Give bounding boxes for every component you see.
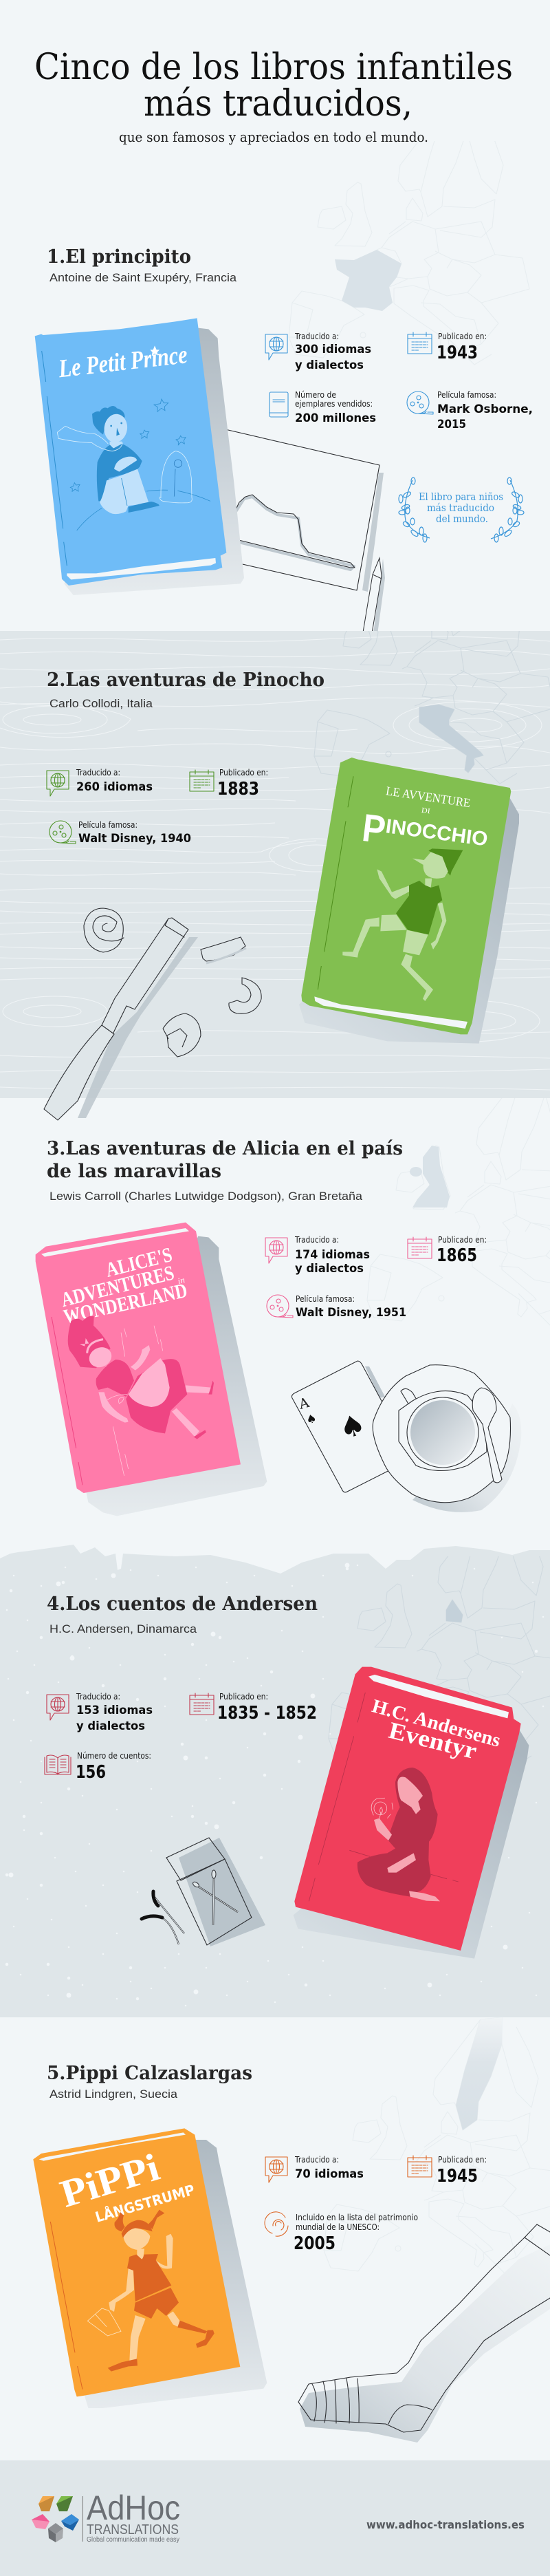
book cover: Pinocchio: LE AVVENTURE <box>385 784 472 810</box>
illustration: paper cutout <box>210 426 384 592</box>
illustration: playing card: A <box>296 1394 311 1413</box>
panel: book 3 Alicia <box>36 1067 550 1516</box>
author: Antoine de Saint Exupéry, Francia <box>50 271 237 284</box>
map: Europe with France highlighted <box>289 141 529 365</box>
book cover: Eventyr <box>294 1667 529 1959</box>
illustration: saucer shadow <box>412 1404 521 1512</box>
stat: translated: y dialectos <box>295 358 364 372</box>
stat: translated: Traducido a: <box>76 768 120 777</box>
background: wood <box>0 631 550 1098</box>
callout: laurel badge <box>399 477 524 542</box>
stat: translated <box>47 1692 153 1733</box>
stat: famous film: Película famosa: <box>437 390 496 400</box>
illustration: sock <box>298 2224 550 2443</box>
figure: little prince <box>57 406 210 530</box>
book cover: Pinocchio: DI <box>421 807 431 815</box>
stat: famous film: Película famosa: <box>296 1294 355 1304</box>
author: Carlo Collodi, Italia <box>50 697 153 710</box>
callout: laurel badge: El libro para niños <box>419 491 503 503</box>
stat: published: Publicado en: <box>219 768 268 777</box>
book cover: Pinocchio <box>299 758 519 1044</box>
stat: published: Publicado en: <box>438 332 487 341</box>
panel: book 5 Pippi <box>33 2017 550 2443</box>
heading: 3.Las aventuras de Alicia en el país <box>47 1138 403 1159</box>
illustration: playing card: ♠ <box>305 1412 318 1428</box>
callout: laurel badge: más traducido <box>427 502 494 514</box>
stat: copies sold: 200 millones <box>295 411 376 425</box>
heading: 4.Los cuentos de Andersen <box>47 1593 318 1615</box>
stat: published <box>190 1692 317 1724</box>
stat: published: 1883 <box>217 779 259 799</box>
logo text: Global communication made easy <box>87 2536 179 2544</box>
illustration: playing card <box>292 1361 412 1492</box>
stat: published <box>408 332 487 363</box>
stat: translated: Traducido a: <box>76 1692 120 1702</box>
stat: translated: y dialectos <box>76 1719 145 1733</box>
stat: published: Publicado en: <box>219 1692 268 1702</box>
logo text: AdHoc <box>87 2489 180 2527</box>
stat: famous film: Walt Disney, 1951 <box>296 1306 406 1320</box>
figure: Alice falling <box>68 1316 214 1476</box>
panel: footer <box>0 2460 550 2576</box>
heading: de las maravillas <box>47 1161 221 1182</box>
stat: translated: 300 idiomas <box>295 343 371 356</box>
website: www.adhoc-translations.es <box>366 2518 525 2531</box>
stat: UNESCO <box>265 2212 418 2254</box>
logo text: TRANSLATIONS <box>87 2522 179 2537</box>
stat: translated: Traducido a: <box>294 1235 339 1245</box>
book cover: Eventyr: Eventyr <box>386 1717 479 1764</box>
book cover: Alice in Wonderland <box>36 1223 267 1516</box>
stat: UNESCO: mundial de la UNESCO: <box>296 2222 380 2232</box>
stat: published <box>408 2155 487 2187</box>
stat: translated <box>47 768 153 796</box>
stat: translated <box>265 332 371 372</box>
book cover: Alice in Wonderland: in <box>177 1275 186 1286</box>
map: Europe with Great Britain highlighted <box>367 1098 550 1325</box>
panel: book 4 Andersen <box>0 1505 550 2017</box>
stat: famous film <box>50 820 191 846</box>
title <box>34 47 513 125</box>
title: Cinco de los libros infantiles <box>34 47 513 88</box>
panel: book 1 El principito <box>35 104 533 645</box>
subtitle: que son famosos y apreciados en todo el mundo. <box>119 129 428 145</box>
title: más traducidos, <box>144 83 412 125</box>
illustration: pencil <box>361 558 385 645</box>
stat: translated: 70 idiomas <box>295 2167 364 2181</box>
heading: 1.El principito <box>47 246 191 268</box>
panel: book 2 Pinocho <box>0 631 550 1121</box>
stat: published: 1945 <box>437 2166 478 2187</box>
stat: famous film <box>407 390 533 431</box>
figure: Pinocchio <box>342 848 463 1001</box>
panel: header <box>34 47 513 145</box>
stat: number of tales: Número de cuentos: <box>77 1751 151 1761</box>
book cover: Le Petit Prince: Le Petit Prince <box>56 341 189 383</box>
author: H.C. Andersen, Dinamarca <box>50 1622 197 1635</box>
author: Astrid Lindgren, Suecia <box>50 2087 178 2101</box>
logo: coloured cubes <box>32 2496 79 2542</box>
heading: 5.Pippi Calzaslargas <box>47 2063 252 2084</box>
stat: famous film <box>267 1294 406 1320</box>
stat: UNESCO: 2005 <box>294 2233 336 2254</box>
heading: 2.Las aventuras de Pinocho <box>47 669 324 691</box>
stat: published: 1835 - 1852 <box>217 1703 317 1724</box>
book cover: Alice in Wonderland: ALICE'S <box>103 1243 175 1282</box>
illustration: chisel <box>44 918 198 1120</box>
stat: translated: y dialectos <box>295 1262 364 1276</box>
stat: famous film: Mark Osborne, <box>437 402 533 416</box>
author: Lewis Carroll (Charles Lutwidge Dodgson), Gran Bretaña <box>50 1190 363 1203</box>
stat: published: 1865 <box>437 1245 477 1266</box>
stat: published: 1943 <box>437 343 478 363</box>
stat: famous film: Walt Disney, 1940 <box>78 832 191 846</box>
callout: laurel badge: del mundo. <box>436 513 488 525</box>
book cover: Alice in Wonderland: ADVENTURES <box>58 1261 177 1311</box>
illustration: matchbox and matches <box>142 1838 265 1946</box>
book cover: Pippi Langstrump: LÅNGSTRUMP <box>93 2181 197 2226</box>
figure: rose under glass <box>160 451 192 503</box>
stat: translated: 153 idiomas <box>76 1704 153 1717</box>
stat: UNESCO: Incluido en la lista del patrimonio <box>296 2213 418 2222</box>
map: Europe with Sweden highlighted <box>324 2017 550 2278</box>
background: snow <box>0 1545 550 2017</box>
stat: number of tales <box>45 1751 151 1783</box>
stat: copies sold <box>270 390 376 425</box>
stat: copies sold: ejemplares vendidos: <box>295 399 373 409</box>
stat: published: Publicado en: <box>438 1235 487 1245</box>
stat: famous film: 2015 <box>437 418 466 431</box>
book cover: Pinocchio: INOCCHIO <box>384 815 489 850</box>
logo text <box>87 2489 180 2544</box>
book cover: Pippi Langstrump: PiPPi <box>56 2146 164 2216</box>
stat: published <box>190 768 268 799</box>
figure: little match girl <box>358 1768 440 1901</box>
icons: stars <box>70 399 186 491</box>
stat: published <box>408 1235 487 1266</box>
stat: translated <box>265 1235 370 1276</box>
stat: translated: Traducido a: <box>294 2155 339 2165</box>
stat: translated <box>265 2155 364 2182</box>
map: Europe with Denmark highlighted <box>329 1556 550 1759</box>
illustration: wood shavings <box>84 908 261 1057</box>
book cover: Le Petit Prince <box>35 318 244 595</box>
book cover: Eventyr: H.C. Andersens <box>369 1695 503 1752</box>
stat: translated: 174 idiomas <box>295 1248 370 1262</box>
illustration: cup and saucer <box>373 1365 510 1503</box>
book cover: Alice in Wonderland: WONDERLAND <box>61 1279 190 1329</box>
heading <box>47 1138 403 1182</box>
book cover: Pinocchio: P <box>360 806 388 852</box>
book cover: Pippi Langstrump <box>33 2128 267 2408</box>
stat: copies sold: Número de <box>295 390 336 400</box>
stat: translated: Traducido a: <box>294 332 339 341</box>
figure: Pippi <box>87 2210 214 2372</box>
stat: published: Publicado en: <box>438 2155 487 2165</box>
illustration: playing card: ♠ <box>336 1407 369 1446</box>
logo divider <box>82 2496 84 2542</box>
map: Europe with Italy highlighted <box>314 631 550 784</box>
stat: famous film: Película famosa: <box>78 820 138 830</box>
stat: number of tales: 156 <box>76 1762 106 1783</box>
stat: translated: 260 idiomas <box>76 780 153 794</box>
